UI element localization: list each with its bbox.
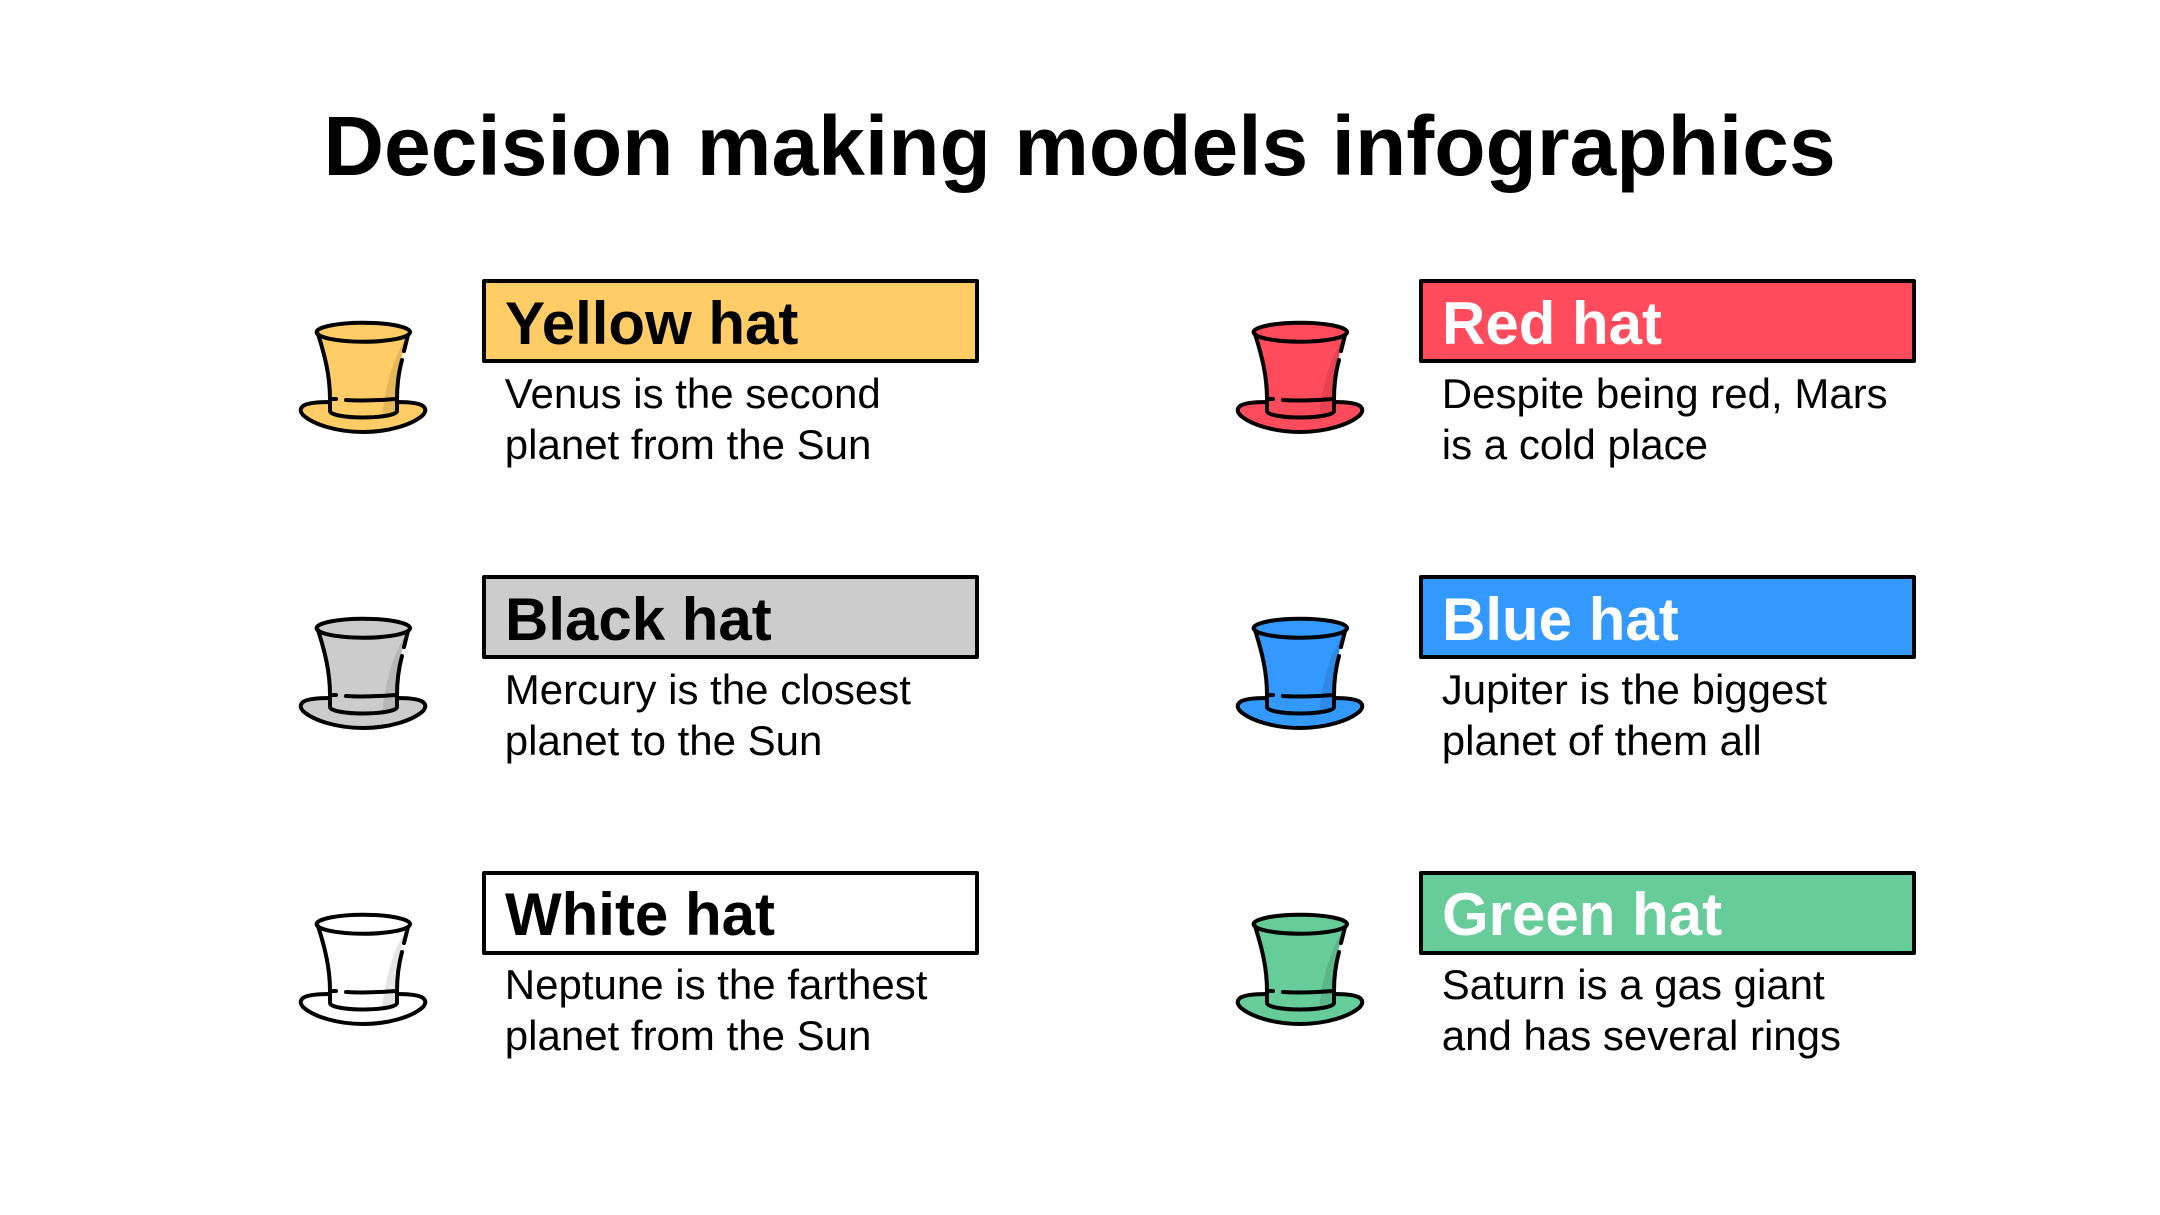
panel: white hat <box>298 871 979 1059</box>
text: black hat description: planet to the Sun <box>505 716 822 764</box>
icon: grey top hat <box>298 616 428 730</box>
heading: Red hat <box>1418 279 1916 363</box>
text: black hat description <box>505 666 911 764</box>
text: red hat description: is a cold place <box>1442 420 1708 468</box>
text: red hat description: Despite being red, Mars <box>1442 370 1888 416</box>
title: Decision making models infographics <box>323 99 1836 193</box>
panel: black hat <box>298 575 979 764</box>
text: red hat description <box>1442 370 1888 468</box>
heading: Green hat <box>1418 870 1916 954</box>
text: white hat description: planet from the Sun <box>505 1012 871 1059</box>
heading: Green hat: Green hat <box>1442 881 1722 948</box>
text: yellow hat description: Venus is the second <box>505 370 881 416</box>
icon: blue top hat <box>1236 616 1364 730</box>
heading: Red hat: Red hat <box>1442 290 1662 356</box>
panel: blue hat <box>1236 575 1916 764</box>
heading: Yellow hat <box>482 279 978 363</box>
text: yellow hat description <box>505 370 881 468</box>
icon: green top hat <box>1236 912 1364 1026</box>
text: black hat description: Mercury is the closest <box>505 666 911 712</box>
text: blue hat description: Jupiter is the biggest <box>1442 666 1827 712</box>
icon: yellow top hat <box>298 320 428 434</box>
panel: green hat <box>1236 871 1916 1059</box>
heading: Yellow hat: Yellow hat <box>505 290 798 356</box>
text: green hat description: and has several rings <box>1442 1012 1841 1059</box>
heading: Black hat <box>482 575 978 659</box>
heading: White hat: White hat <box>505 881 775 948</box>
heading: Blue hat: Blue hat <box>1442 586 1679 652</box>
heading: Blue hat <box>1418 575 1916 659</box>
heading: White hat <box>482 870 978 954</box>
text: green hat description <box>1442 961 1841 1059</box>
heading: Black hat: Black hat <box>505 586 772 652</box>
icon: red top hat <box>1236 320 1364 434</box>
panel: yellow hat <box>298 279 979 468</box>
icon: white top hat <box>298 912 428 1026</box>
text: blue hat description: planet of them all <box>1442 716 1762 764</box>
text: blue hat description <box>1442 666 1827 764</box>
text: white hat description: Neptune is the farthest <box>505 961 927 1008</box>
text: green hat description: Saturn is a gas giant <box>1442 961 1825 1008</box>
panel: red hat <box>1236 279 1916 468</box>
text: white hat description <box>505 961 928 1059</box>
text: yellow hat description: planet from the Sun <box>505 420 871 468</box>
